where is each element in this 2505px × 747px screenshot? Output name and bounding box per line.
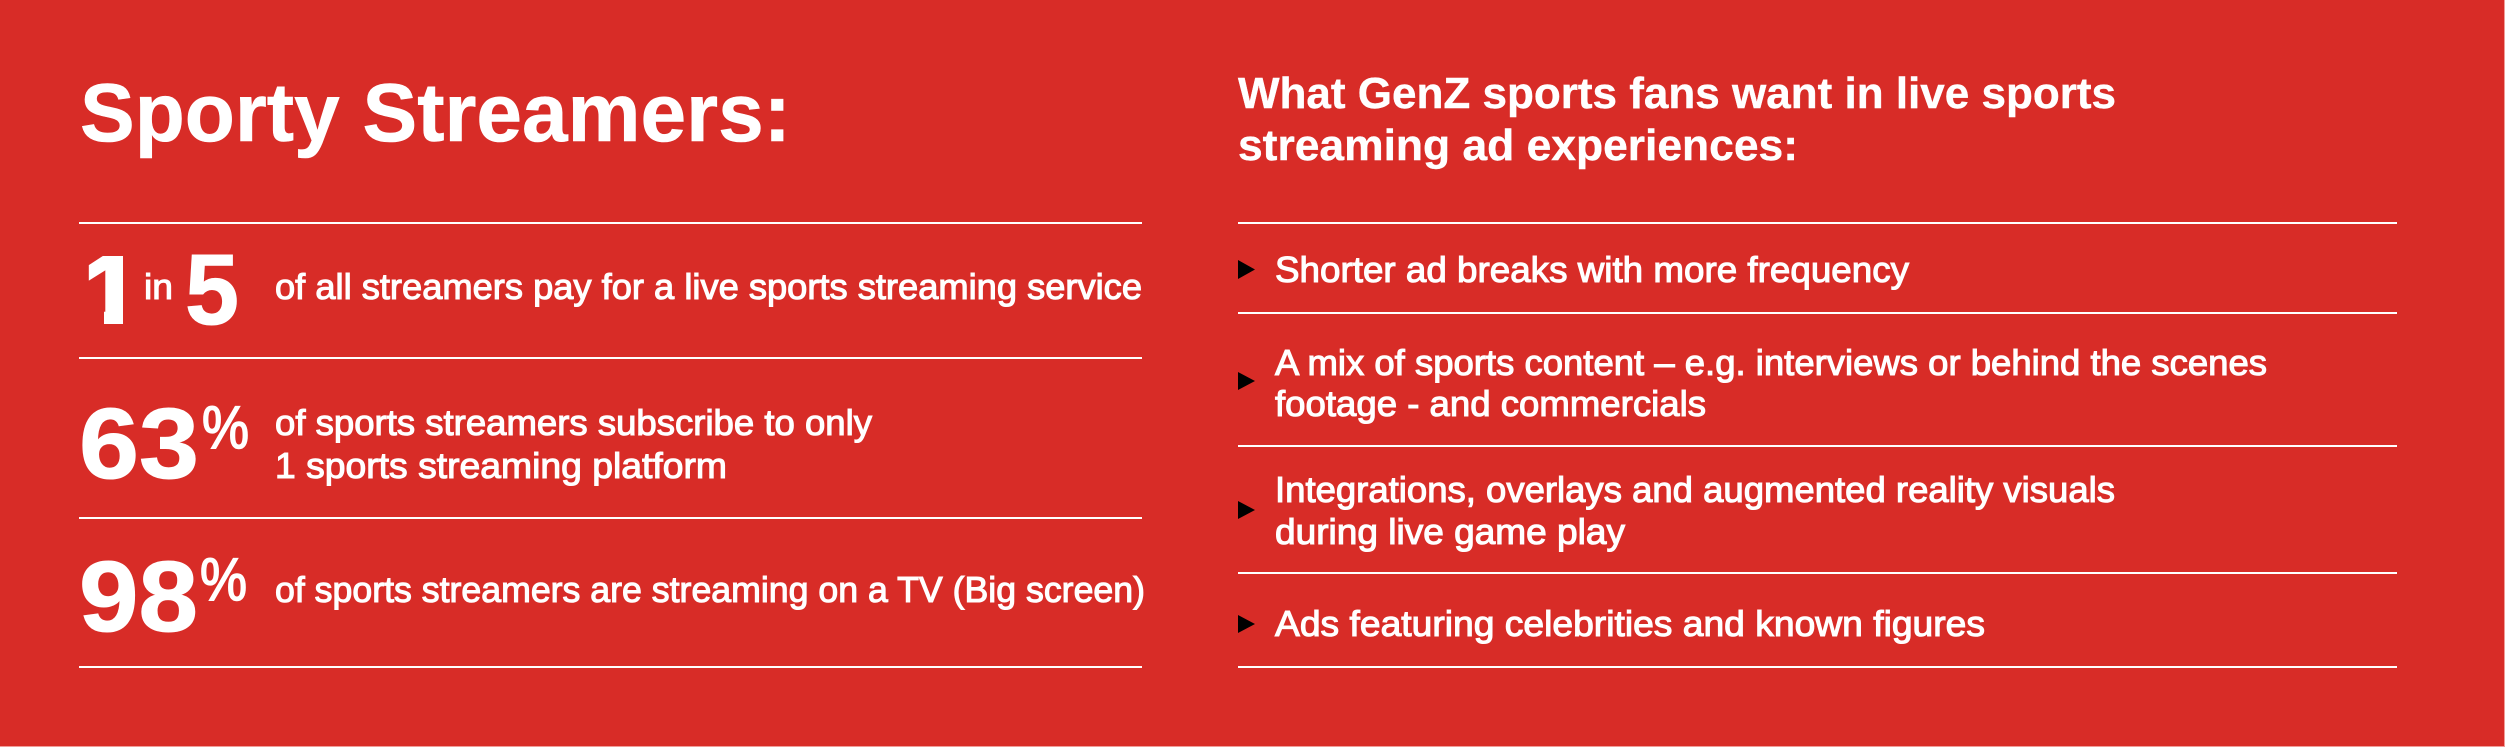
stat: 98%: of sports streamers are streaming on a TV (Big screen): [275, 569, 1145, 610]
panel: sporty streamers stats: [79, 66, 1145, 668]
heading: What GenZ sports fans want: [1238, 69, 2116, 170]
stat: 63%: 1 sports streaming platform: [275, 445, 727, 486]
panel: GenZ ad preferences: [1238, 69, 2397, 668]
stat: 63%: 63: [79, 388, 199, 500]
stat: 1 in 5: 1: [84, 234, 140, 346]
list item: shorter ad breaks: Shorter ad breaks with more frequency: [1275, 249, 1909, 290]
stat: 98%: [79, 541, 1145, 653]
list item: integrations and overlays: Integrations, overlays and augmented reality visuals: [1275, 469, 2115, 510]
stat: 98%: 98: [79, 541, 198, 653]
heading: Sporty Streamers: Sporty Streamers:: [80, 66, 791, 159]
list item: integrations and overlays: during live game play: [1275, 511, 1625, 552]
stat: 1 in 5: 5: [185, 234, 239, 346]
list item: mix of sports content: [1238, 342, 2267, 424]
list item: integrations and overlays: [1238, 469, 2115, 552]
stat: 1 in 5: of all streamers pay for a live sports streaming service: [275, 266, 1142, 307]
stat: 98%: %: [200, 546, 247, 613]
list item: celebrities: Ads featuring celebrities and known figures: [1275, 603, 1985, 644]
list item: mix of sports content: footage - and commercials: [1275, 383, 1706, 424]
stat: 63%: of sports streamers subscribe to only: [275, 402, 872, 443]
list item: mix of sports content: A mix of sports content – e.g. interviews or behind the scenes: [1275, 342, 2267, 383]
heading: What GenZ sports fans want: streaming ad experiences:: [1238, 121, 1798, 170]
stat: 1 in 5: in: [144, 266, 173, 307]
stat: 63%: [79, 388, 872, 500]
heading: What GenZ sports fans want: What GenZ sports fans want in live sports: [1238, 69, 2116, 118]
stat: 63%: %: [202, 394, 249, 461]
stat: 1 in 5: [88, 254, 1141, 326]
